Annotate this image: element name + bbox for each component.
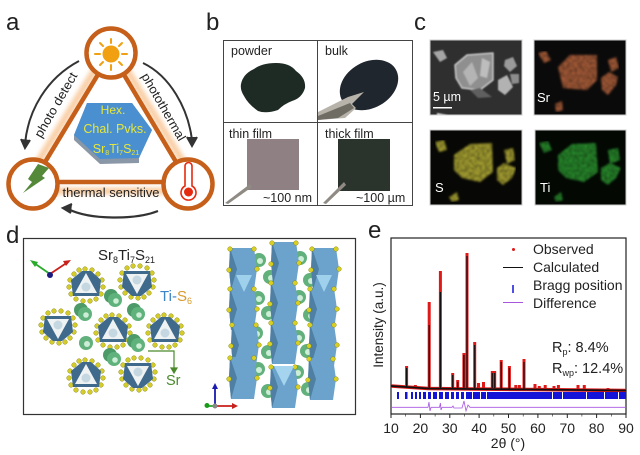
icon: thermometer [164, 160, 212, 208]
SEM image: 5 µm [433, 90, 461, 104]
central hexagon: 21 [131, 150, 139, 157]
label: c: c [414, 9, 426, 36]
grid frame [223, 40, 412, 206]
legend: Difference [533, 295, 597, 311]
central hexagon: 8 [105, 150, 109, 157]
central hexagon: Sr [93, 142, 105, 156]
title: formula: Ti [118, 247, 130, 264]
calculated fit [391, 256, 626, 390]
label: photothermal: photothermal [138, 71, 189, 143]
icon: lightning bolt [8, 160, 58, 208]
central hexagon: Hex. [101, 103, 125, 117]
side view: polyhedra column 1 [227, 247, 261, 399]
plot frame [391, 238, 626, 414]
fit quality: Rp: : 8.4% [568, 340, 609, 356]
x axis tick labels: 40 [471, 420, 487, 436]
label: thermal sensitive: thermal sensitive [62, 186, 160, 200]
EDS map: S: S [435, 180, 444, 195]
triangle glow and edges [27, 52, 194, 191]
axes: side view [204, 383, 238, 409]
frame [24, 238, 356, 414]
side view: polyhedra column 2 [268, 241, 301, 408]
EDS map: Sr [534, 40, 626, 115]
difference curve [391, 401, 626, 411]
fit quality: Rwp: : 12.4% [574, 361, 623, 377]
panel e: XRD refinement chart [371, 238, 634, 451]
legend: Observed [533, 241, 594, 257]
central hexagon: Ti [109, 142, 119, 156]
x axis tick labels: 70 [560, 420, 575, 436]
sample: thin film: thin film [229, 127, 272, 141]
x axis tick labels: 10 [383, 420, 399, 436]
label: photo detect: photo detect [32, 69, 81, 140]
x axis ticks [391, 414, 626, 418]
title: formula: 8 [113, 255, 118, 265]
EDS map: S [430, 130, 522, 205]
arrow: thermal sensitive [63, 204, 158, 218]
x axis tick labels: 90 [618, 420, 634, 436]
label: b: b [206, 9, 219, 36]
fit quality: Rp: R [552, 340, 562, 356]
Bragg positions [397, 392, 626, 399]
sample: powder [231, 44, 305, 112]
sample: thick film: thick film [325, 127, 374, 141]
panel a: property triangle [8, 28, 212, 218]
fit quality: Rp: p [562, 347, 568, 357]
arrow: photothermal [143, 63, 197, 146]
sample: thick film [323, 127, 405, 205]
title: formula: S [135, 247, 145, 264]
legend [503, 241, 623, 311]
sample: thick film: ~100 µm [356, 191, 405, 205]
label: d: d [6, 222, 19, 249]
label: Sr: Sr [166, 373, 181, 389]
sample: powder: powder [231, 44, 272, 58]
y axis title: Intensity (a.u.) [371, 282, 386, 368]
central hexagon: S [123, 142, 131, 156]
panel d: crystal structure [24, 238, 356, 414]
arrow: photo detect [21, 61, 79, 148]
panel c: SEM and EDS maps [430, 40, 626, 205]
side view: polyhedra column 3 [306, 247, 341, 400]
icon: sun [86, 28, 136, 78]
observed data [391, 253, 626, 390]
x axis tick labels: 20 [413, 420, 428, 436]
top view: Sr atoms [74, 289, 145, 366]
EDS map: Ti: Ti [540, 180, 550, 195]
sample: bulk [318, 44, 407, 120]
title: formula: 21 [145, 255, 155, 265]
EDS map: Ti [535, 130, 626, 205]
SEM image [430, 40, 522, 115]
legend: Calculated [533, 259, 599, 275]
central hexagon [74, 103, 152, 164]
panel b: sample forms [223, 40, 412, 206]
title: formula: 7 [130, 255, 135, 265]
side view: Sr atoms [249, 251, 317, 398]
fit quality: Rwp: wp [561, 368, 574, 378]
legend: Bragg position [533, 277, 623, 293]
sample: bulk: bulk [325, 44, 349, 58]
label: Ti-S6: 6 [187, 296, 192, 306]
EDS map: Sr: Sr [537, 90, 551, 105]
central hexagon: Chal. Pvks. [83, 122, 147, 136]
central hexagon: 7 [119, 150, 123, 157]
sample: thin film [225, 127, 312, 205]
label: Ti-S6: Ti-S [160, 288, 187, 305]
axes: top view [30, 260, 71, 278]
label: e: e [368, 217, 381, 244]
x axis tick labels: 80 [589, 420, 605, 436]
label: a: a [6, 9, 20, 36]
x axis tick labels [383, 420, 634, 436]
top view: Ti-S6 units [39, 264, 184, 394]
x axis tick labels: 50 [501, 420, 516, 436]
title: formula: Sr [98, 247, 113, 264]
sample: thin film: ~100 nm [263, 191, 312, 205]
fit quality: Rwp: R [552, 361, 562, 377]
x axis title: 2θ (°) [491, 435, 525, 451]
x axis tick labels: 60 [530, 420, 546, 436]
arrow: Sr pointer [148, 351, 177, 373]
x axis tick labels: 30 [442, 420, 458, 436]
